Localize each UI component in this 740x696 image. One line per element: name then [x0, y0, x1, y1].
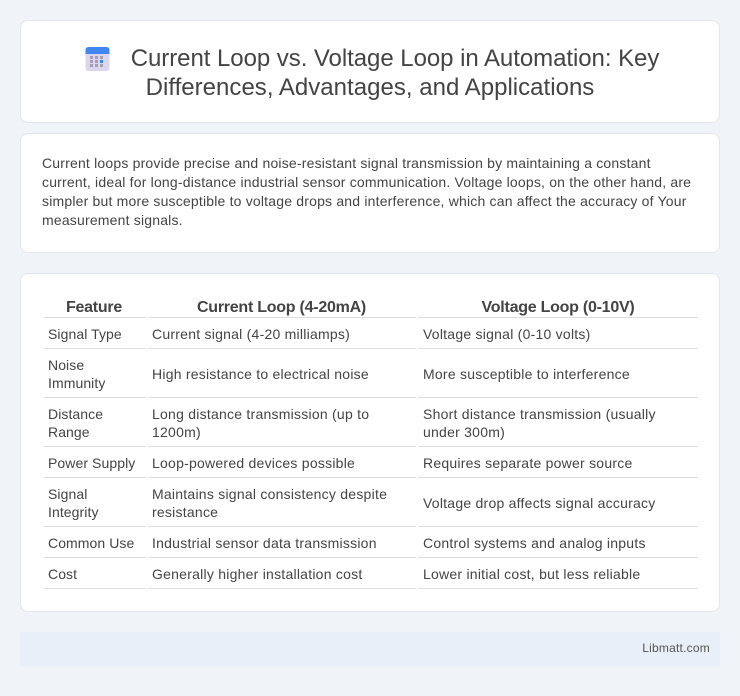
- row: signal type: [48, 326, 591, 342]
- row: distance range: Long distance transmission (up to: [152, 406, 369, 422]
- row: distance range: Range: [48, 424, 90, 440]
- summary text: current, ideal for long-distance industrial sensor communication. Voltage loops, on the other hand, are: [42, 174, 691, 190]
- summary text: [42, 155, 691, 228]
- row: distance range: [48, 406, 656, 440]
- row: cost: [48, 566, 640, 582]
- row: noise immunity: More susceptible to interference: [423, 366, 630, 382]
- row: common use: [48, 535, 646, 551]
- row: signal type: Voltage signal (0-10 volts): [423, 326, 591, 342]
- summary text: measurement signals.: [42, 212, 183, 228]
- row: distance range: Distance: [48, 406, 103, 422]
- row: power supply: Loop-powered devices possible: [152, 455, 355, 471]
- row: common use: Industrial sensor data transmission: [152, 535, 377, 551]
- row: power supply: Power Supply: [48, 455, 135, 471]
- header panel: [20, 20, 720, 123]
- row: power supply: [48, 455, 633, 471]
- row: signal integrity: resistance: [152, 504, 218, 520]
- title: Current Loop vs. Voltage Loop in Automation: Key: [131, 45, 659, 72]
- row: cost: Cost: [48, 566, 77, 582]
- summary text: simpler but more susceptible to voltage drops and interference, which can affect the accuracy of Your: [42, 193, 687, 209]
- summary text: Current loops provide precise and noise-resistant signal transmission by maintaining a constant: [42, 155, 651, 171]
- row: signal integrity: Maintains signal consistency despite: [152, 486, 387, 502]
- row: common use: Common Use: [48, 535, 134, 551]
- row: signal integrity: [48, 486, 656, 520]
- icon: calendar grid: [86, 47, 110, 71]
- table header: Current Loop (4-20mA): [197, 299, 366, 316]
- row: power supply: Requires separate power source: [423, 455, 633, 471]
- row: noise immunity: [48, 357, 630, 391]
- row: signal integrity: Signal: [48, 486, 87, 502]
- summary panel: [20, 133, 720, 253]
- row: noise immunity: Noise: [48, 357, 84, 373]
- footer credit: Libmatt.com: [642, 641, 710, 655]
- table header: [66, 299, 634, 316]
- row: noise immunity: Immunity: [48, 375, 105, 391]
- row: signal integrity: Voltage drop affects signal accuracy: [423, 495, 656, 511]
- row: signal type: Signal Type: [48, 326, 122, 342]
- table header: Voltage Loop (0-10V): [482, 299, 634, 316]
- table header: Feature: [66, 299, 122, 316]
- title: [131, 45, 660, 101]
- row: signal integrity: Integrity: [48, 504, 99, 520]
- comparison table panel: [20, 273, 720, 612]
- row: distance range: Short distance transmission (usually: [423, 406, 656, 422]
- row: cost: Generally higher installation cost: [152, 566, 362, 582]
- row: cost: Lower initial cost, but less reliable: [423, 566, 640, 582]
- row: distance range: 1200m): [152, 424, 201, 440]
- row: common use: Control systems and analog inputs: [423, 535, 646, 551]
- footer bar: [20, 632, 720, 666]
- title: Differences, Advantages, and Applications: [146, 74, 594, 101]
- row: distance range: under 300m): [423, 424, 505, 440]
- row: noise immunity: High resistance to electrical noise: [152, 366, 369, 382]
- row: signal type: Current signal (4-20 milliamps): [152, 326, 350, 342]
